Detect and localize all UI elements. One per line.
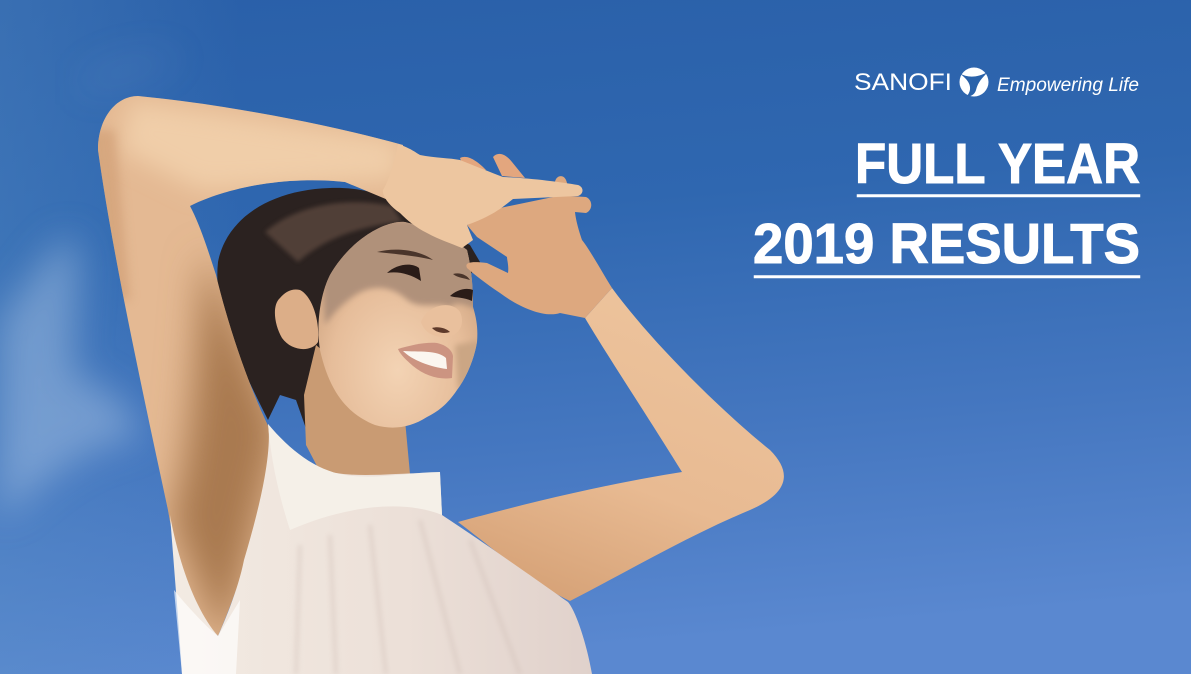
wordmark: SANOFI xyxy=(854,69,952,96)
face xyxy=(318,220,480,428)
tagline: Empowering Life xyxy=(997,74,1139,96)
hair xyxy=(217,188,480,440)
rear fingers xyxy=(460,157,486,172)
logo: Sanofi Empowering Life xyxy=(854,68,1139,96)
title xyxy=(753,132,1140,278)
raised left arm xyxy=(90,90,410,650)
bird icon xyxy=(959,68,988,96)
upper hand xyxy=(383,144,582,248)
clouds xyxy=(0,51,185,520)
mouth xyxy=(398,343,453,378)
dress xyxy=(170,424,592,674)
forehead shadow xyxy=(320,220,480,325)
woman photo illustration xyxy=(90,90,784,674)
eyebrows and eyes xyxy=(377,250,473,301)
nose xyxy=(421,305,462,337)
hands xyxy=(383,144,612,318)
lower hand xyxy=(466,176,612,318)
ear xyxy=(275,289,318,349)
right arm xyxy=(458,288,784,601)
title line one: FULL YEAR xyxy=(855,132,1140,196)
title line two: 2019 RESULTS xyxy=(753,212,1140,276)
neck xyxy=(304,345,410,476)
